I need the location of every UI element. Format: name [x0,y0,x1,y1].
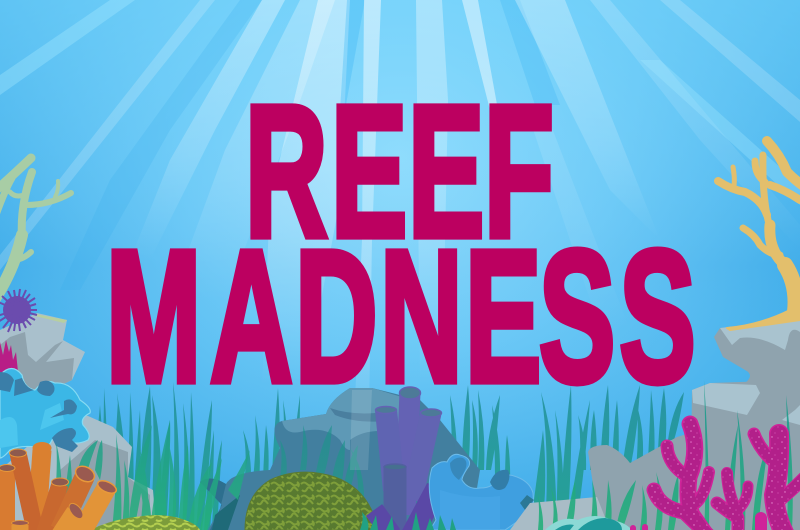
right upper rock [714,318,800,383]
grass in front of blue rock [280,425,364,510]
front seagrass left [55,420,250,530]
title line 1: REEF [245,66,554,276]
short grass over purple sponges [360,512,456,530]
right lower rocks [510,380,800,530]
right blue cup coral [429,454,534,530]
title [106,66,696,421]
large brain coral [245,472,378,530]
orange tube sponges [0,442,118,530]
sea urchin [0,289,37,332]
title line 2: MADNESS [106,211,696,421]
magenta anemone [0,340,18,380]
front seagrass right [538,380,793,530]
right branching coral [718,141,800,330]
left lower rock [0,410,155,530]
brain coral small left [90,515,200,530]
left branching coral [0,158,71,300]
teal fan shell [545,516,632,530]
ray over reef rock [350,390,372,470]
pink branching corals [633,424,800,530]
back seagrass [88,382,684,530]
left blue cup coral [0,368,90,458]
back rock: blue reef [200,388,480,530]
purple tube sponges [374,387,442,530]
left grey rock [0,313,85,395]
